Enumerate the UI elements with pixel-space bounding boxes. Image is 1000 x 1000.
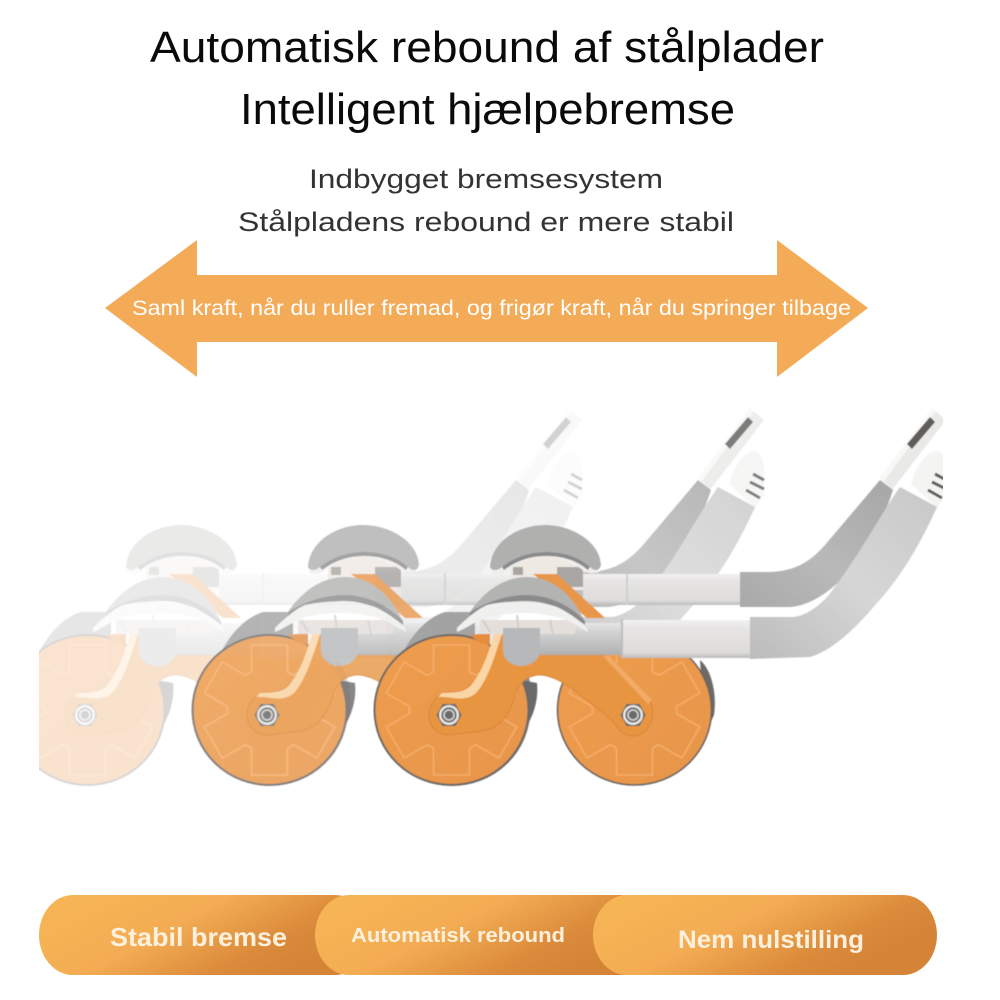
product illustration: ab roller in three rebound positions: [10, 408, 946, 785]
front roller: [374, 408, 946, 785]
right wheel: [558, 635, 715, 785]
title: Intelligent hjælpebremse: [240, 85, 735, 134]
front handle: [510, 451, 946, 659]
pill: Automatisk rebound: [315, 895, 655, 975]
rear orange arm: [533, 574, 605, 618]
double-headed arrow: [105, 240, 868, 377]
arrow label: Saml kraft, når du ruller fremad, og frigør kraft, når du springer tilbage: [132, 297, 851, 320]
subtitle: Stålpladens rebound er mere stabil: [238, 207, 734, 237]
orange frame body and spring arms: [429, 633, 653, 736]
pill: Automatisk rebound: Automatisk rebound: [351, 925, 565, 947]
subtitle: Indbygget bremsesystem: [309, 164, 663, 194]
feature pill bar: [39, 895, 937, 975]
title: Automatisk rebound af stålplader: [150, 23, 824, 72]
title: [150, 23, 824, 134]
front seat pad: [457, 577, 588, 666]
pill: Stabil bremse: [39, 895, 369, 975]
rear handle: [583, 408, 946, 607]
middle roller ghost: [192, 408, 764, 785]
pill: Nem nulstilling: [593, 895, 937, 975]
rear seat pad: [490, 525, 601, 590]
faintest roller ghost: [10, 408, 582, 785]
pill: Nem nulstilling: Nem nulstilling: [678, 926, 864, 954]
left wheel: [374, 612, 537, 785]
pill: Stabil bremse: Stabil bremse: [110, 922, 287, 952]
subtitle: [238, 164, 734, 237]
